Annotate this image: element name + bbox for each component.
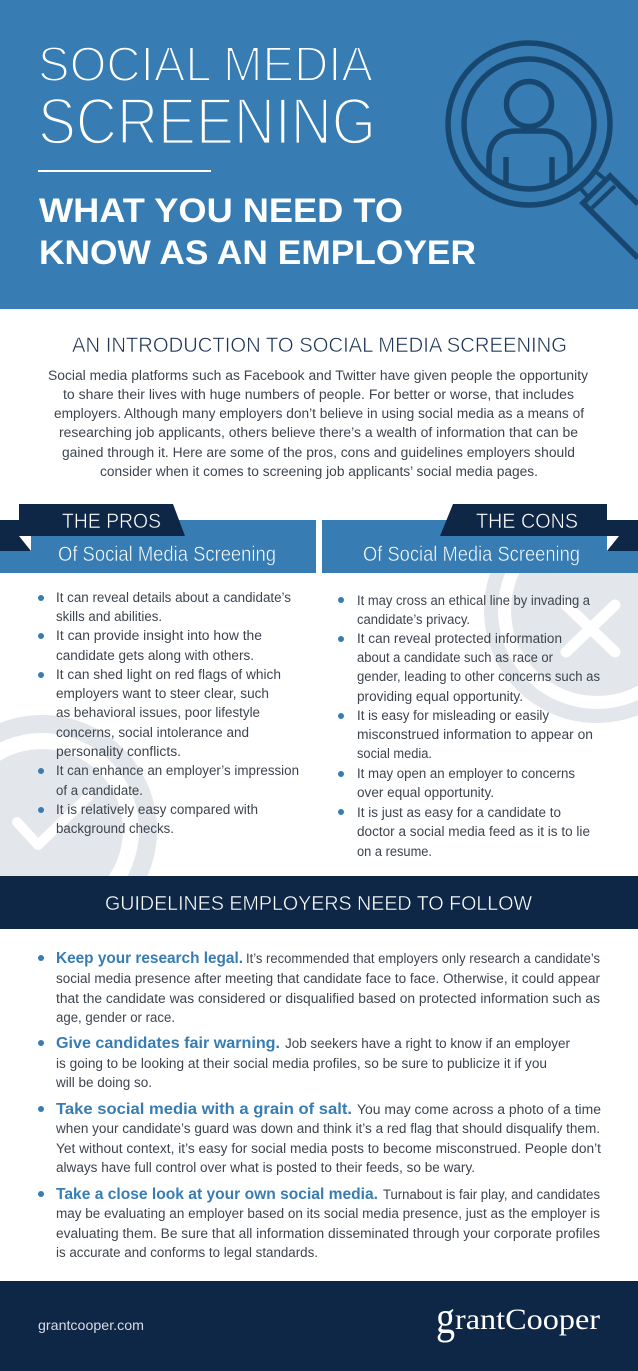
panel: guidelines — [0, 876, 638, 1260]
guideline 1: social media presence after meeting that candidate face to face. Otherwise, it could appear — [56, 971, 601, 986]
intro text: researching job applicants, others believe there’s a wealth of information that can be — [59, 425, 578, 440]
guideline 3 — [38, 1101, 601, 1175]
con item 3 — [338, 708, 593, 761]
intro text: Social media platforms such as Facebook and Twitter have given people the opportunity — [48, 368, 588, 383]
con item 2: It can reveal protected information — [357, 631, 562, 646]
guideline 2: Give candidates fair warning. — [56, 1035, 280, 1052]
con item 2 — [338, 631, 600, 704]
pro item 5 — [38, 802, 258, 836]
con item 2: about a candidate such as race or — [357, 650, 553, 665]
guideline 1: It’s recommended that employers only research a candidate’s — [246, 951, 600, 966]
panel: cons — [322, 504, 638, 859]
con item 5: doctor a social media feed as it is to lie — [357, 824, 590, 839]
intro text — [48, 368, 588, 479]
pro item 4: It can enhance an employer’s impression — [56, 763, 299, 778]
guideline 4: is accurate and conforms to legal standards. — [56, 1245, 318, 1260]
subtitle: KNOW AS AN EMPLOYER — [39, 234, 476, 272]
pro item 5: background checks. — [56, 821, 174, 836]
intro text: to share their lives with huge numbers of people. For better or worse, that includes — [63, 387, 574, 402]
guideline 2 — [38, 1035, 570, 1090]
guideline 2: is going to be looking at their social media profiles, so be sure to publicize it if you — [56, 1056, 547, 1071]
con item 2: providing equal opportunity. — [357, 689, 523, 704]
title: SOCIAL MEDIA — [38, 38, 373, 92]
guideline 1: age, gender or race. — [56, 1010, 175, 1025]
pro item 3: concerns, social intolerance and — [56, 725, 249, 740]
pro item 1: skills and abilities. — [56, 609, 162, 624]
guideline 2: Job seekers have a right to know if an employer — [285, 1036, 570, 1051]
con item 2: gender, leading to other concerns such as — [357, 669, 600, 684]
title rule — [38, 170, 211, 172]
subtitle: WHAT YOU NEED TO — [39, 192, 403, 230]
panel: introduction — [48, 334, 588, 479]
pro item 2: candidate gets along with others. — [56, 648, 254, 663]
intro heading: AN INTRODUCTION TO SOCIAL MEDIA SCREENING — [72, 334, 567, 357]
pro item 1 — [38, 590, 291, 624]
guideline 4: Turnabout is fair play, and candidates — [383, 1187, 600, 1202]
guideline 4: may be evaluating an employer based on its social media presence, just as the employer is — [56, 1206, 600, 1221]
pro item 2: It can provide insight into how the — [56, 628, 262, 643]
pros list — [38, 590, 299, 836]
con item 1: It may cross an ethical line by invading a — [357, 593, 590, 608]
guideline 4: evaluating them. Be sure that all information disseminated through your corporate profiles — [56, 1226, 600, 1241]
con item 4: It may open an employer to concerns — [357, 766, 575, 781]
con item 3: social media. — [357, 746, 432, 761]
con item 4 — [338, 766, 575, 800]
guideline 4 — [38, 1186, 600, 1260]
intro text: gained through it. Here are some of the pros, cons and guidelines employers should — [62, 445, 575, 460]
con item 3: misconstrued information to appear on — [357, 727, 593, 742]
pro item 5: It is relatively easy compared with — [56, 802, 258, 817]
guideline 2: will be doing so. — [55, 1075, 152, 1090]
pro item 3: as behavioral issues, poor lifestyle — [56, 705, 260, 720]
con item 5: It is just as easy for a candidate to — [357, 805, 561, 820]
cons banner — [322, 504, 638, 573]
header panel — [0, 0, 638, 309]
pro item 4: of a candidate. — [56, 783, 143, 798]
guideline 1: Keep your research legal. — [56, 950, 243, 967]
panel: pros — [0, 504, 316, 836]
guideline 3: always have full control over what is posted to their feeds, so be wary. — [56, 1160, 475, 1175]
cons banner: Of Social Media Screening — [363, 543, 580, 566]
guidelines heading bar — [0, 876, 638, 929]
pro item 3: It can shed light on red flags of which — [56, 667, 281, 682]
con item 5 — [338, 805, 590, 859]
guideline 3: Take social media with a grain of salt. — [56, 1101, 352, 1118]
guideline 3: You may come across a photo of a time — [357, 1102, 601, 1117]
footer url: grantcooper.com — [38, 1317, 144, 1333]
pro item 1: It can reveal details about a candidate’s — [56, 590, 291, 605]
con item 3: It is easy for misleading or easily — [357, 708, 549, 723]
pros banner: THE PROS — [62, 510, 161, 533]
icon: magnifying glass with person — [448, 43, 638, 258]
con item 4: over equal opportunity. — [357, 785, 494, 800]
pros banner — [0, 504, 316, 573]
title: SCREENING — [38, 84, 376, 158]
pro item 3: personality conflicts. — [56, 744, 181, 759]
guideline 4: Take a close look at your own social media. — [56, 1186, 378, 1203]
pro item 2 — [38, 628, 262, 663]
guideline 1: that the candidate was considered or disqualified based on protected information such as — [56, 991, 600, 1006]
cons list — [338, 593, 600, 859]
con item 5: on a resume. — [357, 844, 432, 859]
watermark: cross mark — [484, 573, 638, 723]
logo: rantCooper — [455, 1303, 600, 1336]
pro item 4 — [38, 763, 299, 798]
intro text: consider when it comes to screening job applicants’ social media pages. — [100, 464, 538, 479]
title — [38, 38, 376, 158]
pro item 3 — [38, 667, 281, 759]
footer — [0, 1281, 638, 1371]
watermark: check mark — [0, 715, 157, 876]
guideline 1 — [38, 950, 601, 1025]
subtitle — [39, 192, 476, 272]
guideline 3: Yet without context, it’s easy for social media posts to become misconstrued. People don’t — [56, 1141, 601, 1156]
intro text: employers. Although many employers don’t believe in using social media as a means of — [54, 406, 584, 421]
con item 1 — [338, 593, 590, 627]
pro item 3: employers want to steer clear, such — [56, 686, 269, 701]
guideline 3: when your candidate’s guard was down and think it’s a red flag that should disqualify them. — [55, 1121, 600, 1136]
guidelines heading bar: GUIDELINES EMPLOYERS NEED TO FOLLOW — [105, 893, 532, 915]
logo: g — [436, 1292, 455, 1343]
pros banner: Of Social Media Screening — [58, 543, 276, 566]
cons banner: THE CONS — [476, 510, 578, 533]
con item 1: candidate’s privacy. — [357, 612, 470, 627]
